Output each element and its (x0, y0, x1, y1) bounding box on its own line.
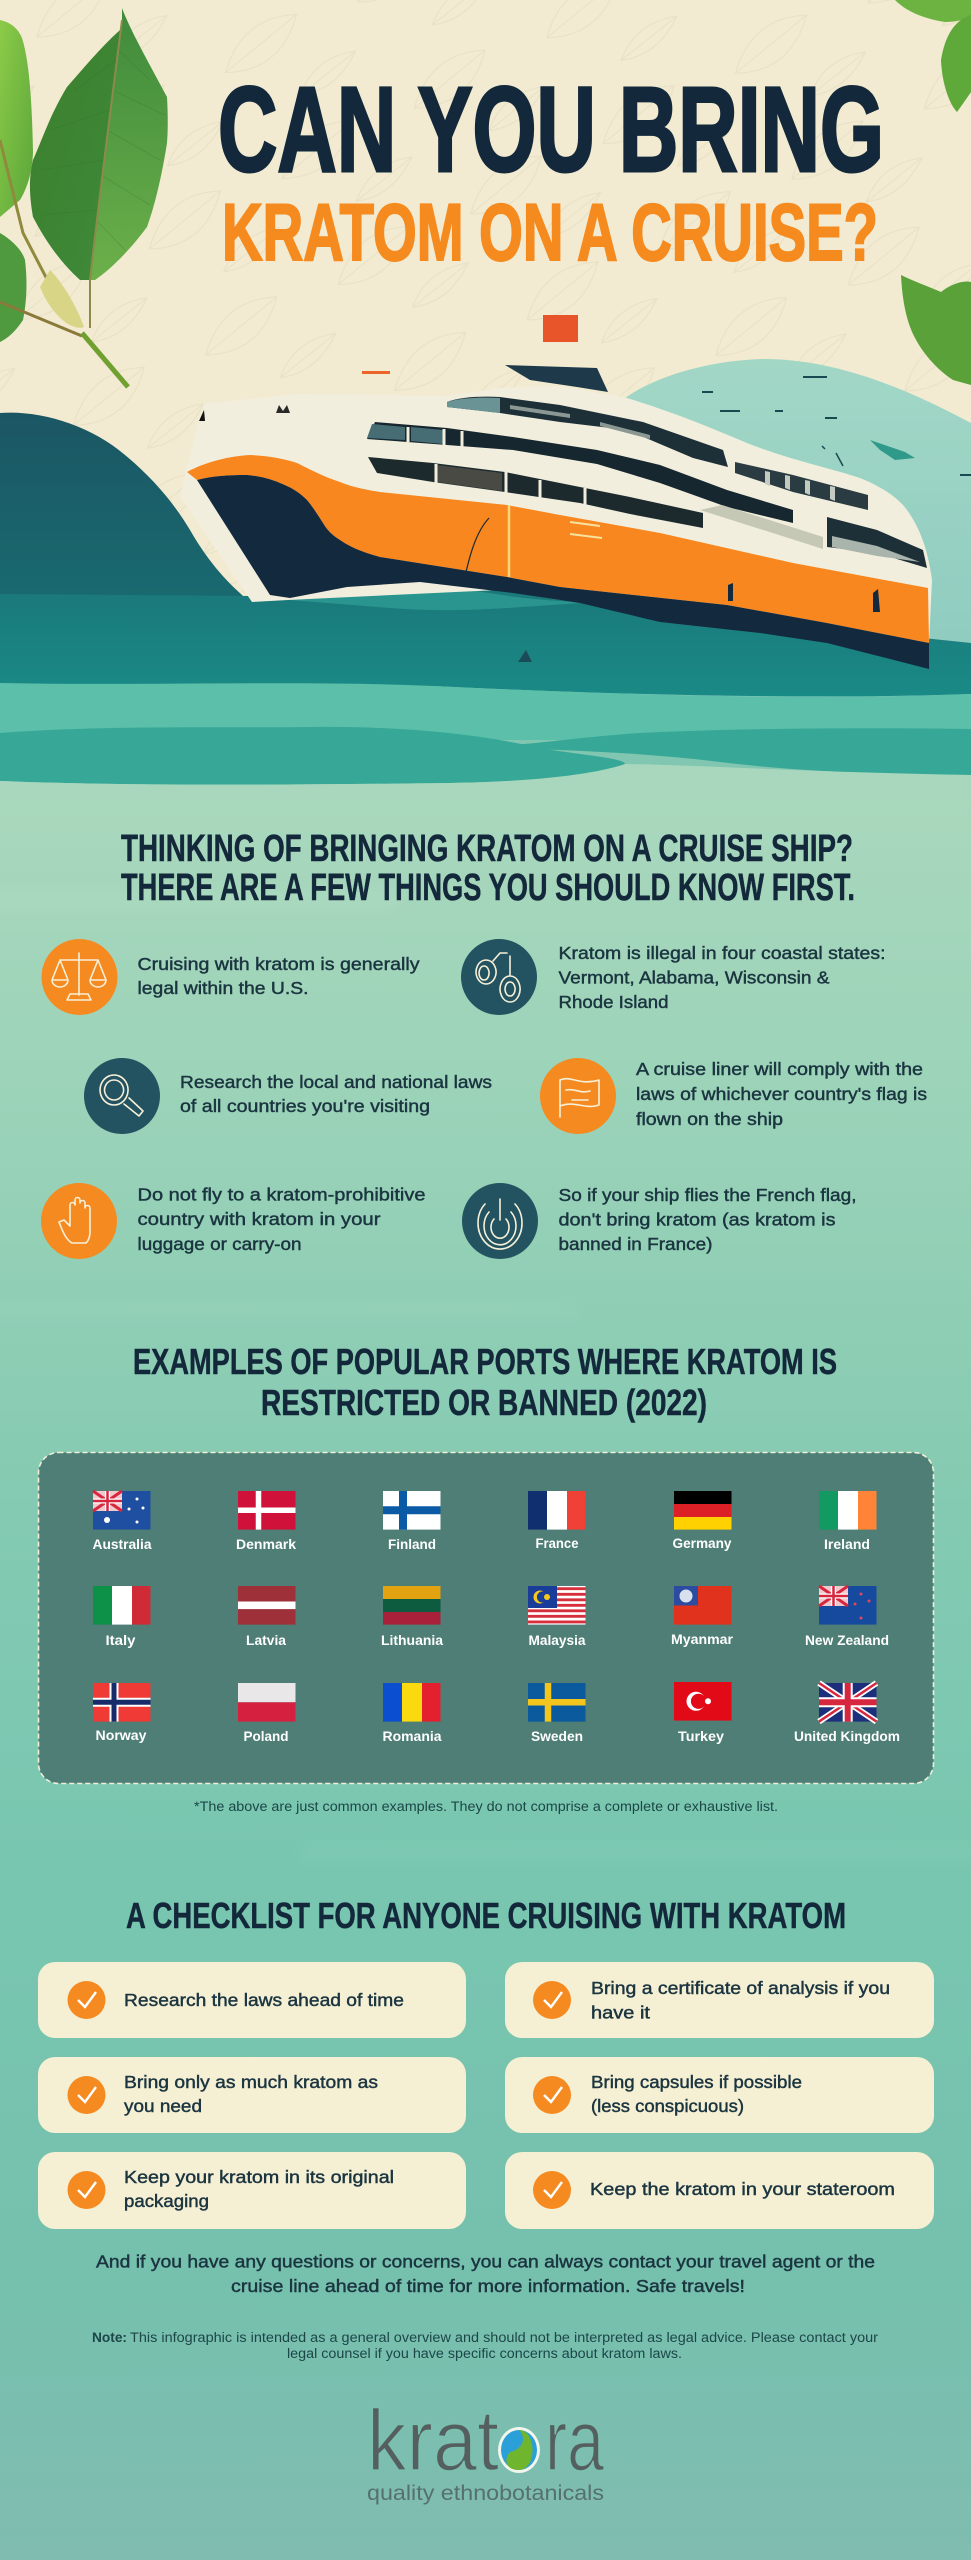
card: stateroom: Keep the kratom in your stateroom (590, 2179, 895, 2199)
card: stateroom (505, 2152, 934, 2229)
heading: things to know (121, 828, 855, 909)
flag: New Zealand (819, 1586, 876, 1625)
closing text: And if you have any questions or concerns, you can always contact your travel agent or the (96, 2252, 875, 2272)
card: original packaging: Keep your kratom in its original (124, 2167, 394, 2187)
text: legal within the U.S. (138, 978, 308, 998)
card: only as much: Bring only as much kratom as (124, 2072, 378, 2092)
country labels: Finland (388, 1536, 436, 1552)
icon: scales (42, 939, 118, 1015)
text (558, 943, 886, 1012)
navy lower hull (197, 475, 929, 669)
left dark hill (0, 413, 250, 602)
flag: United Kingdom (819, 1683, 876, 1722)
left pale leaf (0, 20, 33, 217)
card: only as much: you need (124, 2096, 202, 2116)
text: A cruise liner will comply with the (636, 1059, 923, 1079)
country labels (92, 1535, 900, 1744)
side branch (0, 302, 82, 336)
text: Do not fly to a kratom-prohibitive (138, 1184, 426, 1204)
card: capsules: (less conspicuous) (591, 2096, 744, 2116)
logo: kratora: quality ethnobotanicals (367, 2482, 604, 2505)
country labels: Myanmar (671, 1631, 734, 1647)
text: laws of whichever country's flag is (636, 1084, 927, 1104)
text: Vermont, Alabama, Wisconsin & (558, 968, 830, 988)
logo: kratora: krat (367, 2393, 499, 2489)
card: only as much (38, 2057, 466, 2133)
country labels: Germany (672, 1535, 732, 1551)
fact: legal in U.S. (42, 939, 420, 1015)
closing text: cruise line ahead of time for more information. Safe travels! (231, 2276, 745, 2296)
country labels: New Zealand (805, 1632, 889, 1648)
leaf cluster left (0, 8, 168, 387)
grey deck band (700, 505, 823, 549)
icon: handcuffs (461, 939, 537, 1015)
logo: kratora (367, 2393, 604, 2505)
leaf veins (40, 50, 165, 250)
hull curve line (466, 518, 489, 572)
country labels: Norway (96, 1727, 147, 1743)
mid water band (0, 683, 971, 740)
icon: flag (540, 1058, 616, 1134)
flag: Italy (93, 1586, 150, 1625)
text: flown on the ship (636, 1109, 783, 1129)
flag: Poland (238, 1683, 296, 1722)
passengers (276, 405, 290, 413)
heading: popular ports (133, 1341, 837, 1423)
cruise ship (180, 315, 932, 669)
figures on hull (728, 583, 880, 612)
fact: illegal states (461, 939, 886, 1015)
flag: Romania (383, 1683, 440, 1722)
hero illustration (0, 0, 971, 800)
logo: kratora: ra (545, 2393, 604, 2489)
flag: Finland (383, 1491, 440, 1530)
text (180, 1072, 492, 1116)
forward windows (827, 517, 927, 568)
legal note (92, 2330, 879, 2361)
country labels: Romania (382, 1728, 442, 1744)
main stem (82, 333, 128, 387)
country labels: Australia (92, 1536, 152, 1552)
card: certificate of analysis: have it (591, 2002, 650, 2022)
flag: Germany (674, 1491, 732, 1530)
icon: warning power rings (462, 1183, 538, 1259)
red flag (543, 315, 578, 342)
flag: Lithuania (383, 1586, 440, 1625)
title (218, 61, 884, 278)
flag: Latvia (238, 1586, 296, 1625)
middle deck windows (367, 422, 793, 523)
lower right water shape (483, 728, 971, 775)
upper stem (0, 140, 50, 285)
text (138, 1184, 426, 1254)
card: research the laws (38, 1962, 466, 2038)
card: original packaging: packaging (124, 2191, 209, 2211)
flag: Norway (93, 1683, 150, 1722)
top right leaf (895, 0, 971, 22)
fact: do not fly (41, 1183, 426, 1259)
text: country with kratom in your (138, 1209, 381, 1229)
flag: Denmark (238, 1491, 296, 1530)
specks on hill (702, 376, 971, 476)
card: research the laws: Research the laws ahead of time (124, 1990, 404, 2010)
closing text (96, 2252, 875, 2296)
icon: hand (41, 1183, 117, 1259)
flag: Ireland (819, 1491, 876, 1530)
flag: Myanmar (674, 1586, 732, 1625)
logo mark: yin-yang leaf and water (498, 2427, 540, 2473)
right leaf (941, 15, 971, 112)
country labels: Italy (106, 1632, 136, 1648)
country labels: Denmark (236, 1536, 296, 1552)
dark water band (0, 575, 971, 696)
panel: countries (38, 1452, 934, 1784)
upper right windows (735, 462, 868, 510)
flag: Turkey (674, 1682, 732, 1721)
country labels: Sweden (531, 1728, 583, 1744)
text: Research the local and national laws (180, 1072, 492, 1092)
hull cream body (180, 386, 932, 643)
pale water edge (0, 764, 971, 800)
large leaf left half (30, 8, 122, 280)
text: banned in France) (558, 1234, 712, 1254)
fact: flag law (540, 1058, 927, 1134)
checklist (38, 1962, 934, 2229)
right teal hill (620, 359, 971, 700)
flag: Sweden (528, 1683, 586, 1722)
text: So if your ship flies the French flag, (558, 1185, 856, 1205)
orange raft (362, 371, 390, 374)
text: Kratom is illegal in four coastal states: (558, 943, 886, 963)
lower left water shape (0, 727, 625, 785)
text (138, 954, 420, 998)
legal note: Note: (92, 2330, 127, 2345)
flag: France (528, 1491, 586, 1530)
yellow bud (40, 270, 84, 328)
water ripple (290, 584, 600, 610)
text: Cruising with kratom is generally (138, 954, 420, 974)
footnote: *The above are just common examples. They do not comprise a complete or exhaustive list. (194, 1799, 778, 1814)
legal note: legal counsel if you have specific concerns about kratom laws. (287, 2346, 682, 2361)
country labels: Ireland (824, 1536, 870, 1552)
hull name plate (570, 522, 602, 538)
flag: Australia (93, 1491, 150, 1530)
text: luggage or carry-on (138, 1234, 302, 1254)
orange hull band (187, 455, 929, 643)
country labels: France (536, 1535, 579, 1551)
country labels: United Kingdom (794, 1728, 900, 1744)
text (558, 1185, 856, 1254)
text (636, 1059, 927, 1129)
heading: popular ports: RESTRICTED OR BANNED (2022) (261, 1382, 707, 1423)
text: of all countries you're visiting (180, 1096, 430, 1116)
card: original packaging (38, 2152, 466, 2229)
small sailboat (518, 650, 532, 662)
country labels: Lithuania (381, 1632, 443, 1648)
legal note: This infographic is intended as a general overview and should not be interpreted as legal advice. Please contact your (130, 2330, 879, 2345)
country labels: Poland (244, 1728, 288, 1744)
card: capsules (505, 2057, 934, 2133)
lower small leaf (0, 233, 26, 342)
bow mast (199, 410, 205, 421)
flag: Malaysia (528, 1586, 586, 1625)
roof canopy (505, 365, 608, 392)
fact: research laws (84, 1058, 492, 1134)
top deck windows (447, 397, 728, 467)
card: certificate of analysis (505, 1962, 934, 2038)
lower right leaf (901, 275, 971, 385)
text: don't bring kratom (as kratom is (558, 1210, 836, 1230)
large leaf right half (90, 8, 168, 280)
lower deck windows (368, 457, 703, 528)
cream sky (0, 0, 971, 600)
country labels: Malaysia (528, 1632, 586, 1648)
hull seam (508, 505, 510, 577)
country labels: Latvia (246, 1632, 286, 1648)
text: Rhode Island (558, 992, 668, 1012)
card: certificate of analysis: Bring a certificate of analysis if you (591, 1978, 890, 1998)
icon: magnifier (84, 1058, 160, 1134)
card: capsules: Bring capsules if possible (591, 2072, 802, 2092)
midrib and stem (90, 20, 122, 328)
fact: French flag (462, 1183, 856, 1259)
country labels: Turkey (678, 1728, 724, 1744)
